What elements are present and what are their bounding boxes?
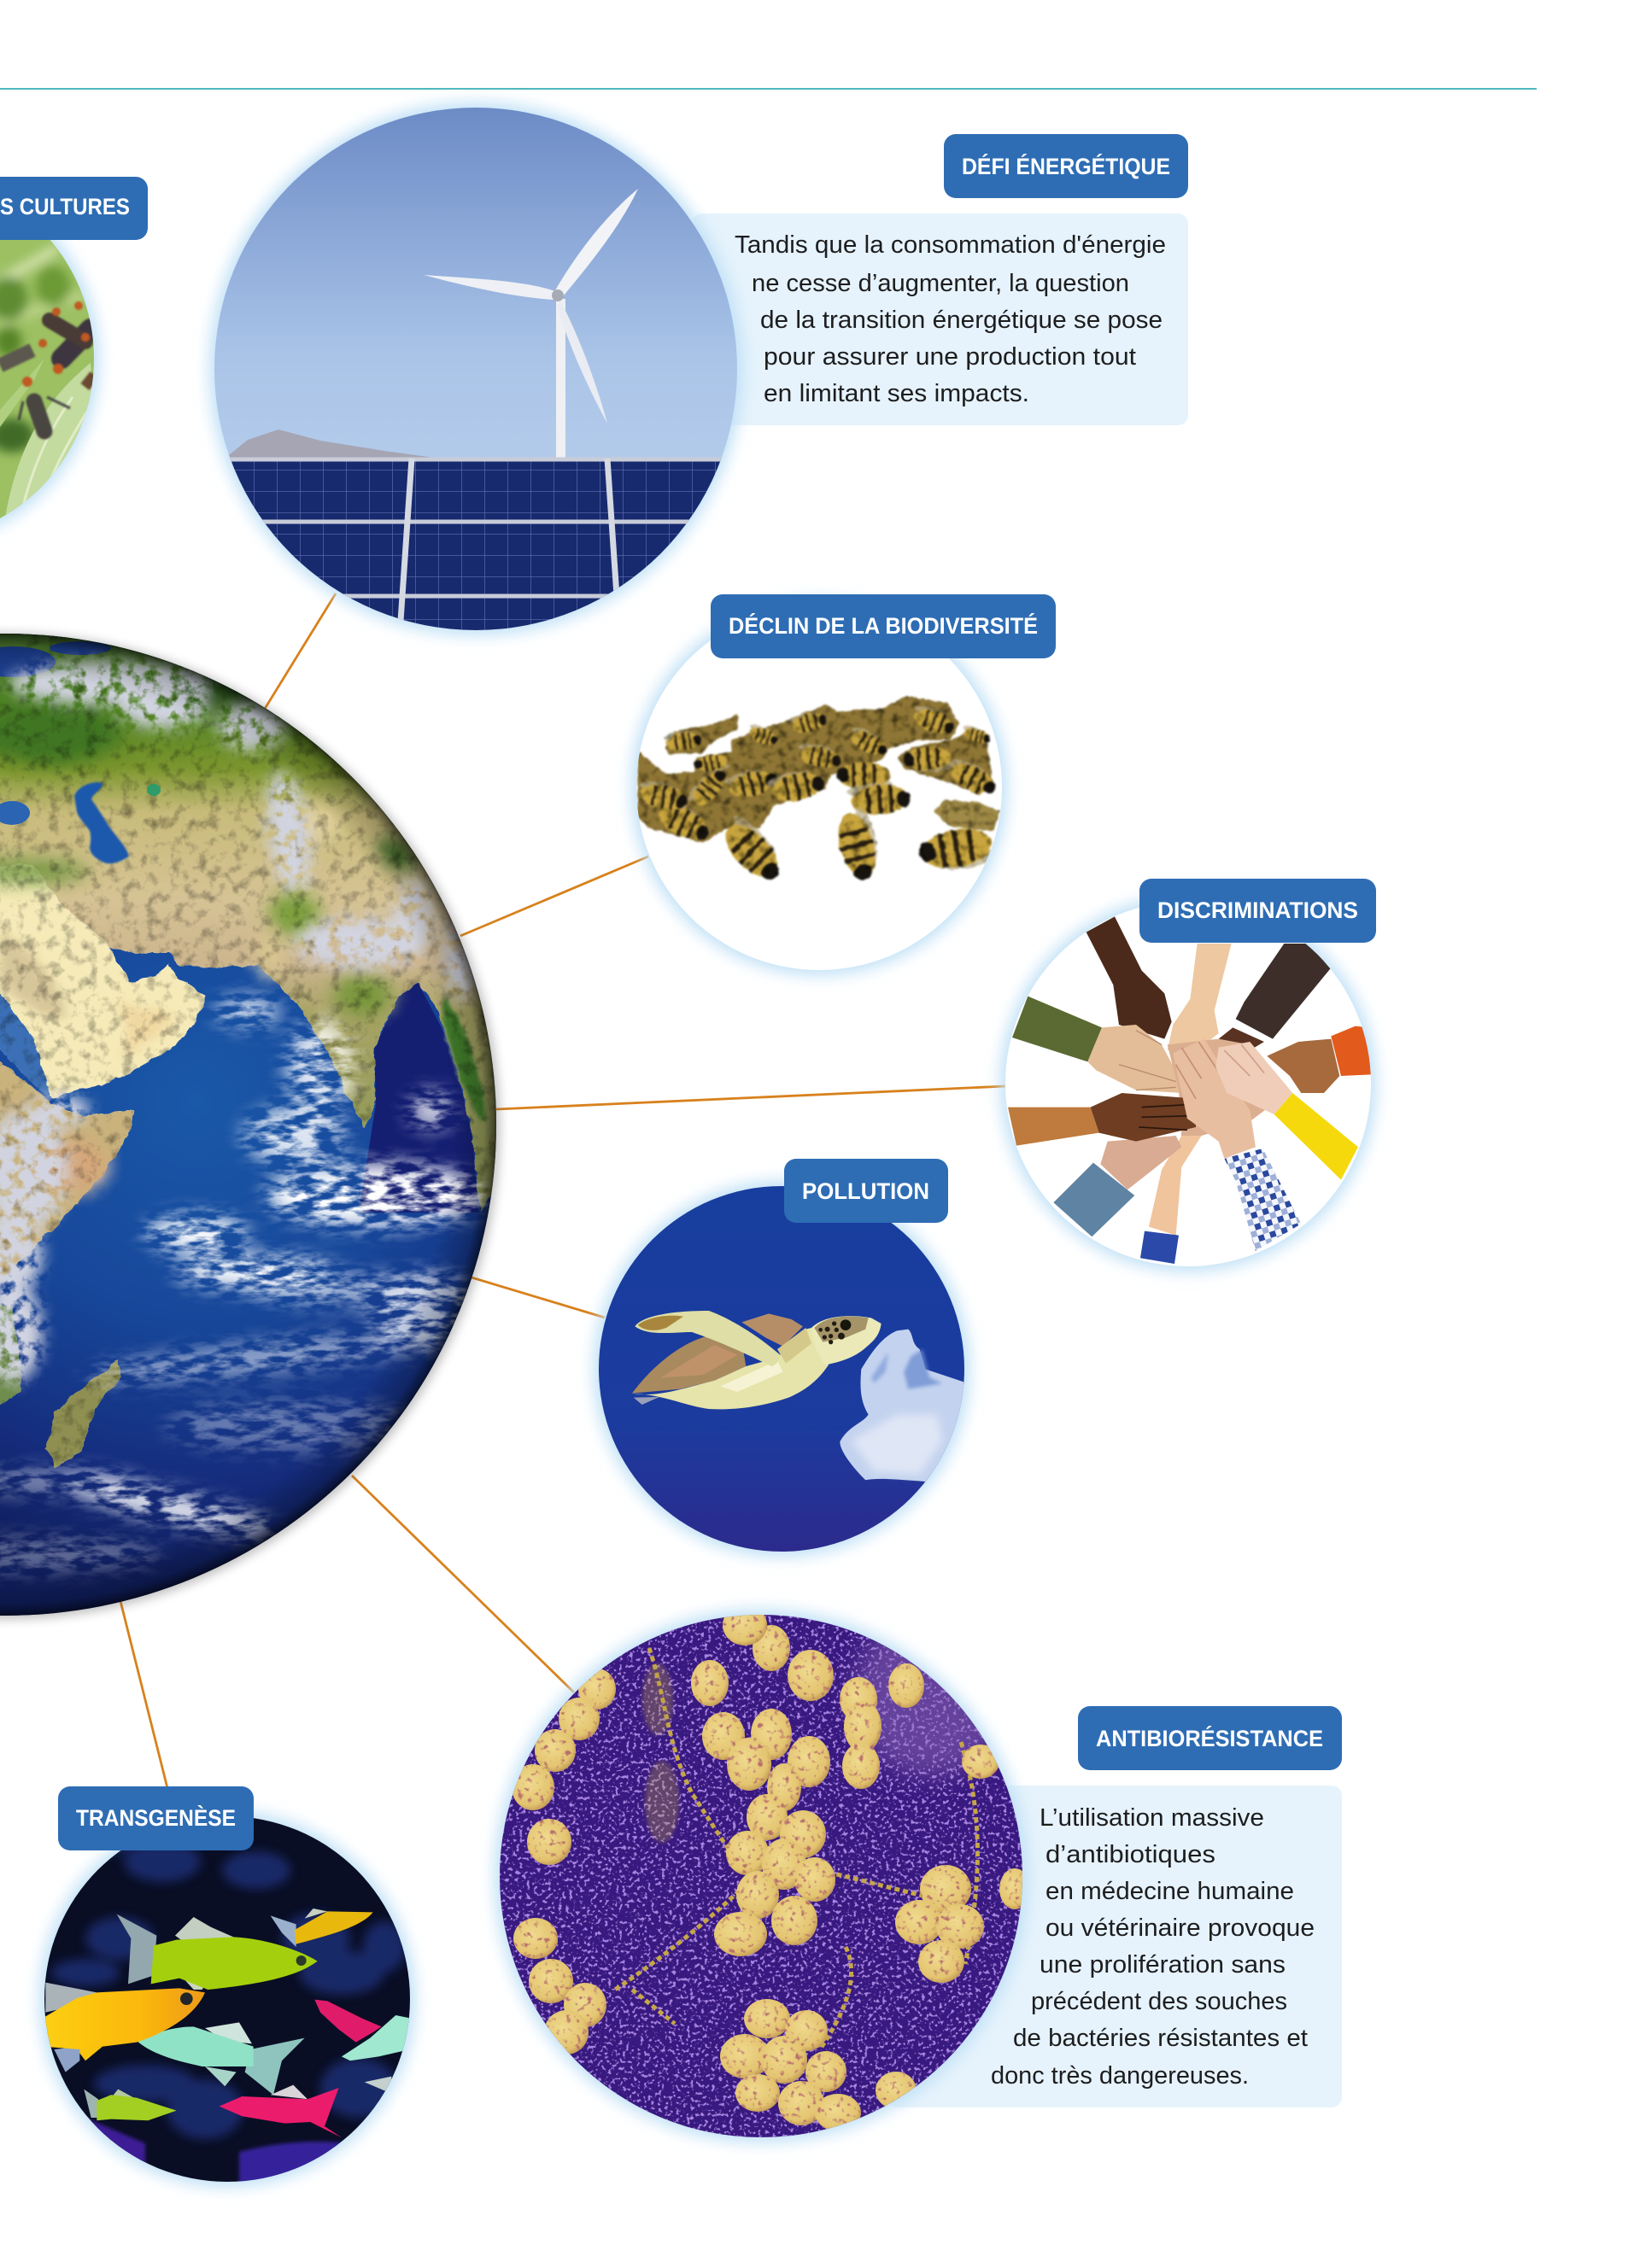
- label: antibiotic resistance: ANTIBIORÉSISTANCE: [1096, 1725, 1323, 1751]
- panel: antibiotic resistance text: L’utilisation massive: [1040, 1804, 1264, 1832]
- turtle belly: [632, 1328, 829, 1409]
- madagascar: [46, 1360, 120, 1467]
- regional greens: [0, 669, 422, 1015]
- africa horn: [0, 1059, 134, 1288]
- label: discriminations: [1139, 879, 1376, 943]
- grey cloud bands over land: [0, 661, 478, 1383]
- arm: bare top centre: [1168, 944, 1232, 1050]
- turtle shell: [632, 1336, 746, 1394]
- photo circle: antibiotic-resistant bacteria: [495, 1605, 1030, 2142]
- label: energy challenge: [944, 134, 1188, 198]
- pink fish bottom: [271, 2085, 308, 2099]
- white ocean clouds: [0, 997, 487, 1571]
- label: energy challenge: DÉFI ÉNERGÉTIQUE: [962, 153, 1170, 179]
- panel: antibiotic resistance text: donc très dangereuses.: [991, 2062, 1249, 2090]
- pink fish right: [314, 2000, 382, 2043]
- panel: energy challenge text: pour assurer une production tout: [764, 343, 1136, 371]
- yellow fish: [45, 1983, 97, 2013]
- turtle flipper: [635, 1311, 780, 1366]
- label: transgenesis: [58, 1786, 254, 1850]
- panel: antibiotic resistance text: ou vétérinaire provoque: [1046, 1914, 1315, 1942]
- label: discriminations: DISCRIMINATIONS: [1157, 897, 1358, 923]
- small green fish: [84, 2090, 98, 2118]
- arabia: [0, 863, 206, 1098]
- arm: lower centre: [1149, 1136, 1202, 1236]
- arm: brown bare: [1008, 1108, 1099, 1146]
- photo circle: joined hands: [1000, 896, 1376, 1271]
- arm: dark sleeve top right: [1236, 944, 1331, 1039]
- southern africa: [0, 1302, 21, 1407]
- arm: yellow sleeve: [1274, 1093, 1358, 1180]
- photo circle: dead bees: [631, 599, 1007, 975]
- panel: antibiotic resistance text: [888, 1786, 1342, 2107]
- globe: [0, 598, 598, 1622]
- turtle head: [811, 1316, 882, 1365]
- central palm mass: [1168, 1039, 1273, 1138]
- bay of bengal: [359, 982, 478, 1213]
- label: crop destruction: S CULTURES: [0, 194, 130, 219]
- eurasia: [0, 634, 496, 1213]
- panel: energy challenge text: ne cesse d’augmenter, la question: [752, 270, 1129, 297]
- arm: dark skin top left: [1086, 916, 1172, 1039]
- orange fish: [271, 1915, 296, 1947]
- arm: orange cuff: [1267, 1039, 1339, 1093]
- panel: antibiotic resistance text: d’antibiotiques: [1046, 1841, 1215, 1868]
- teal fish right: [342, 2015, 410, 2060]
- plastic bag: [840, 1330, 964, 1482]
- label: biodiversity decline: DÉCLIN DE LA BIODIVERSITÉ: [729, 612, 1038, 639]
- panel: antibiotic resistance text: précédent des souches: [1031, 1988, 1287, 2015]
- connector lines from the globe: [120, 593, 1005, 1788]
- photo circle: wind turbine and solar panels: [209, 102, 742, 635]
- panel: energy challenge text: de la transition énergétique se pose: [760, 307, 1163, 334]
- photo circle: turtle and plastic bag: [594, 1181, 969, 1557]
- label: pollution: [784, 1159, 948, 1223]
- panel: antibiotic resistance text: en médecine humaine: [1046, 1878, 1294, 1905]
- label: pollution: POLLUTION: [802, 1178, 929, 1204]
- arm: denim: [1053, 1163, 1134, 1236]
- label: biodiversity decline: [711, 594, 1056, 658]
- label: antibiotic resistance: [1078, 1706, 1342, 1770]
- panel: antibiotic resistance text: de bactéries résistantes et: [1013, 2025, 1308, 2052]
- arm: olive sleeve: [1012, 997, 1102, 1061]
- arm: check shirt: [1224, 1149, 1301, 1251]
- red sea: [0, 989, 51, 1098]
- panel: energy challenge text: [692, 213, 1188, 425]
- panel: energy challenge text: Tandis que la consommation d'énergie: [735, 231, 1166, 259]
- label: crop destruction: [0, 177, 148, 240]
- photo circle: locusts on crops: [0, 171, 102, 547]
- top rule: [0, 88, 1537, 90]
- panel: antibiotic resistance text: une prolifération sans: [1040, 1951, 1286, 1979]
- photo circle: transgenic glowing fish: [39, 1811, 415, 2187]
- seas of central asia: [0, 641, 161, 863]
- panel: energy challenge text: en limitant ses impacts.: [764, 380, 1029, 407]
- green fish: [117, 1914, 156, 1984]
- label: transgenesis: TRANSGENÈSE: [76, 1804, 236, 1831]
- teal fish: [205, 2022, 252, 2043]
